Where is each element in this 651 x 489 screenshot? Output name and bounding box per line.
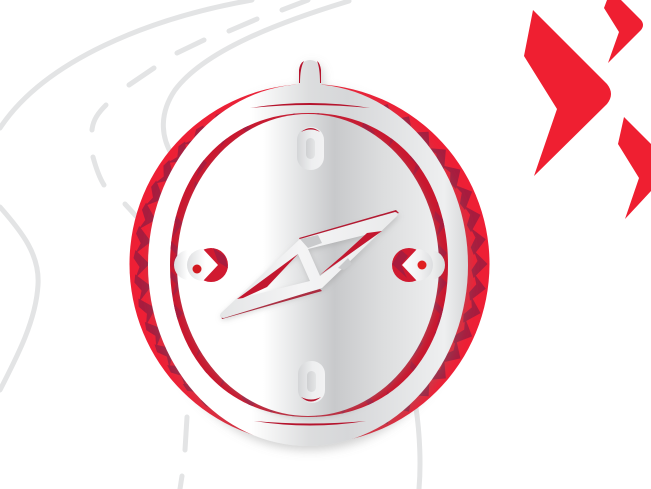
left pivot dot	[192, 264, 202, 274]
arrow: lower	[618, 117, 651, 219]
left pivot red disc	[194, 248, 228, 282]
right pivot teardrop	[402, 249, 433, 281]
right pivot	[392, 248, 445, 282]
road lines background	[0, 0, 420, 489]
right rim bump	[415, 250, 445, 280]
road: right lower line	[416, 408, 420, 489]
inner red ring	[170, 113, 448, 417]
inner silver disc	[177, 114, 439, 416]
knob red edge	[299, 61, 321, 83]
outer silver ring with knob	[148, 60, 468, 446]
road: inner curve	[163, 1, 349, 155]
needle south cut-out red	[237, 254, 298, 299]
outer red ring	[130, 84, 490, 444]
arrow: top	[604, 0, 643, 63]
knob	[294, 60, 326, 90]
compass body	[130, 60, 490, 446]
needle band shading	[300, 235, 352, 270]
right pivot dot	[418, 260, 426, 270]
left pivot	[174, 248, 228, 282]
bottom slot	[298, 361, 325, 403]
right pivot red disc	[392, 248, 426, 282]
needle body with cut-outs	[220, 212, 398, 318]
left rim bump	[174, 250, 204, 280]
road: lower dashes	[180, 417, 187, 489]
arrow: large	[524, 10, 611, 176]
left pivot teardrop	[187, 249, 218, 281]
lower groove line	[254, 421, 366, 426]
compass needle	[220, 210, 399, 319]
ring groove lines	[250, 103, 370, 426]
top slot	[297, 127, 324, 170]
needle red underside	[221, 210, 399, 319]
red chevron arrows	[524, 0, 651, 219]
road: dashed centre line	[92, 0, 308, 216]
needle north cut-out red	[320, 231, 382, 275]
upper groove line	[250, 103, 370, 108]
road: left lower curve	[0, 207, 38, 390]
road: outer curve	[0, 0, 252, 128]
ring chevron pattern	[133, 98, 488, 430]
